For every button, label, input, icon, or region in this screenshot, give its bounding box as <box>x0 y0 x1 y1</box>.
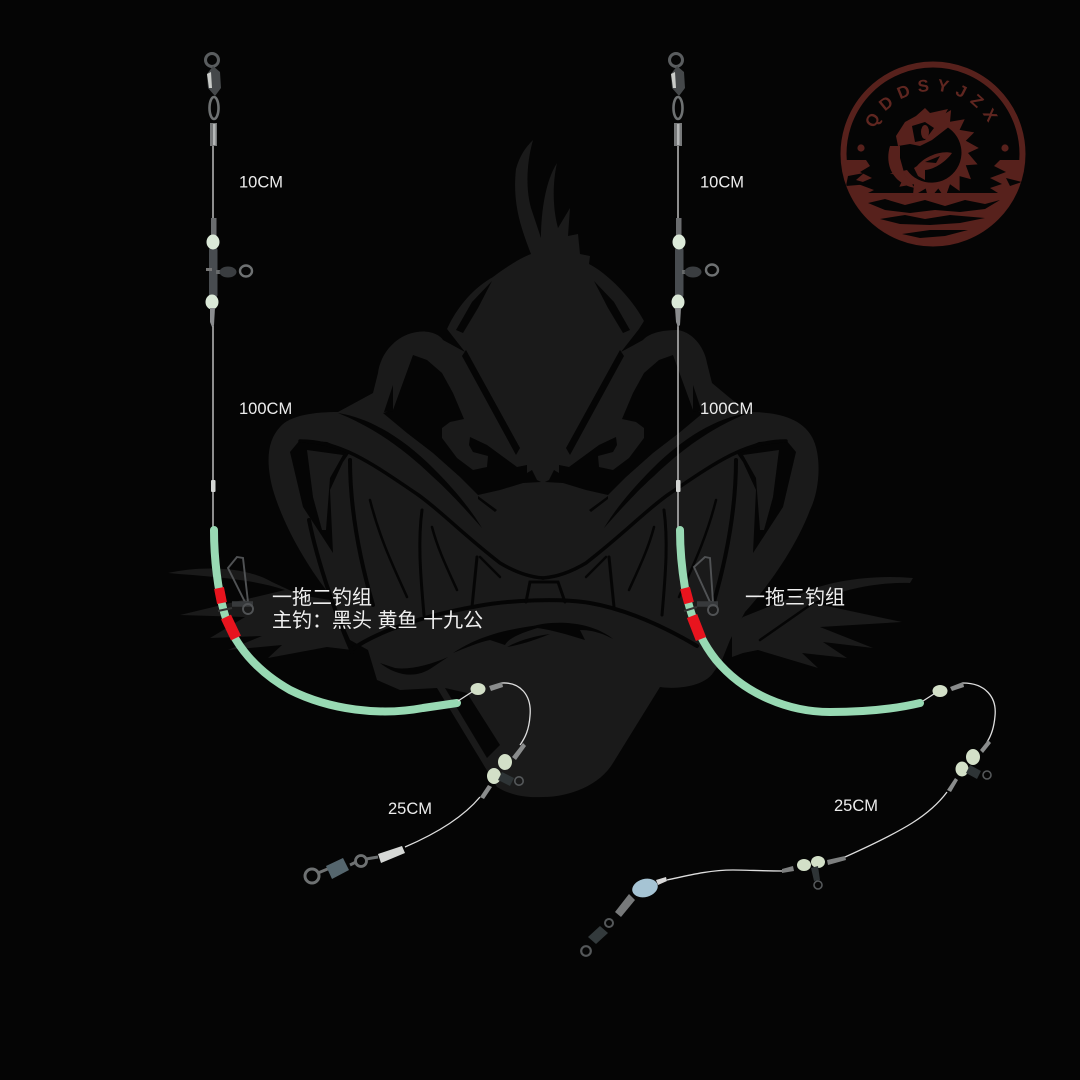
right rig: upper swivel and main line <box>670 54 718 530</box>
length labels: left rig: 10CM <box>239 174 283 192</box>
logo dots <box>857 144 1009 152</box>
length labels: left rig <box>239 174 432 818</box>
caption: two-hook rig: 主钓：黑头 黄鱼 十九公 <box>272 609 483 632</box>
length labels: right rig: 25CM <box>834 797 878 815</box>
length labels: right rig <box>700 174 878 815</box>
background silhouette: angry duck mascot <box>168 140 913 797</box>
caption: three-hook rig: 一拖三钓组 <box>745 586 845 609</box>
caption: two-hook rig <box>272 586 483 632</box>
left rig: side swivel <box>216 266 252 278</box>
brand logo: QDDSYJZX round badge <box>840 62 1026 246</box>
right rig: snap clip <box>694 557 718 615</box>
length labels: right rig: 100CM <box>700 400 753 418</box>
length labels: right rig: 10CM <box>700 174 744 192</box>
left rig: lower leader with beads and swivel <box>305 682 530 883</box>
left rig: snap clip <box>228 557 253 614</box>
caption: two-hook rig: 一拖二钓组 <box>272 586 372 609</box>
length labels: left rig: 100CM <box>239 400 292 418</box>
right rig: lower leader with three hook stations <box>581 682 995 956</box>
logo emblem: swirl, bird head and fish <box>888 108 979 200</box>
logo lettering: QDDSYJZX <box>866 79 998 126</box>
right rig: glow tube with red sleeves <box>680 530 920 712</box>
left rig: glow beads <box>206 234 220 310</box>
right rig: glow beads <box>672 234 686 310</box>
left rig: glow tube with red sleeves <box>214 530 457 711</box>
right rig: side swivel <box>682 264 718 278</box>
left rig: upper swivel and main line <box>206 54 252 530</box>
length labels: left rig: 25CM <box>388 800 432 818</box>
